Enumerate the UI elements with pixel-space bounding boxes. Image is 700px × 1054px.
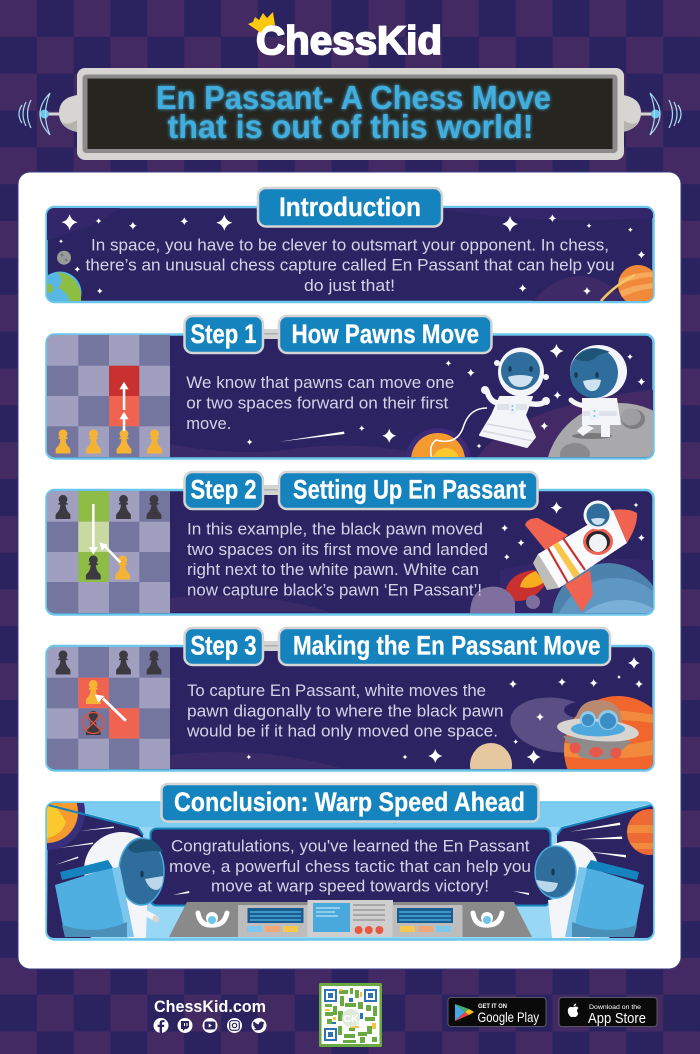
icon: sun bbox=[406, 428, 471, 457]
badge: App Store: Download on the bbox=[589, 1004, 641, 1011]
text: step 2: right next to the white pawn. White can bbox=[187, 561, 479, 579]
icon: moon bbox=[57, 251, 71, 265]
left console screen bbox=[238, 905, 308, 937]
panel: step 1 bbox=[45, 333, 655, 460]
text: conclusion: move at warp speed towards victory! bbox=[211, 878, 489, 896]
title text bbox=[156, 79, 551, 145]
icon: tan planet bbox=[470, 743, 512, 769]
left antenna bbox=[19, 93, 77, 135]
heading: Introduction: Introduction bbox=[279, 192, 421, 222]
right antenna bbox=[623, 93, 681, 135]
icon: blue planet bbox=[552, 563, 653, 613]
text: step 3: To capture En Passant, white moves the bbox=[187, 682, 486, 700]
badge: Google Play: Google Play bbox=[478, 1009, 539, 1025]
chess board bbox=[47, 335, 170, 457]
icon: twitch bbox=[178, 1018, 192, 1033]
icon: play triangle bbox=[455, 1004, 474, 1021]
stars bbox=[59, 214, 645, 295]
right console screen bbox=[392, 905, 462, 937]
heading: step 3: Making the En Passant Move bbox=[293, 630, 600, 660]
title text: En Passant- A Chess Move bbox=[156, 79, 551, 116]
comet bbox=[279, 432, 344, 442]
icon: cloud bbox=[470, 587, 540, 615]
icon: twitter bbox=[252, 1018, 266, 1033]
badge: App Store bbox=[559, 998, 657, 1027]
logo wordmark: ChessKid bbox=[256, 19, 442, 63]
icon: instagram bbox=[227, 1018, 242, 1033]
right dial bbox=[473, 912, 502, 925]
panel: introduction bbox=[45, 206, 655, 304]
green modules bbox=[325, 988, 377, 1043]
text: step 1: move. bbox=[186, 415, 231, 433]
arrows bbox=[89, 504, 121, 563]
heading: step 2 bbox=[184, 472, 538, 509]
black pawns bbox=[56, 495, 161, 580]
yellow modules bbox=[325, 989, 376, 1029]
footer: website: ChessKid.com bbox=[154, 997, 266, 1016]
heading: step 1: How Pawns Move bbox=[292, 319, 479, 349]
panel: step 2 bbox=[45, 488, 655, 616]
text: step 3: would be if it had only moved one space. bbox=[186, 722, 498, 740]
text: step 2 bbox=[187, 520, 488, 600]
control console bbox=[169, 900, 532, 937]
icon: crown bbox=[248, 12, 275, 33]
icon: facebook bbox=[154, 1018, 168, 1033]
text: step 1: or two spaces forward on their first bbox=[186, 394, 449, 412]
icon: astronaut on moon bbox=[570, 345, 627, 437]
icon: UFO bbox=[556, 700, 640, 760]
heading: step 1 bbox=[184, 316, 492, 353]
speed lines over message bbox=[173, 891, 529, 895]
text: conclusion bbox=[169, 838, 531, 896]
icon: ringed planet bbox=[600, 265, 653, 301]
heading: conclusion: Conclusion: Warp Speed Ahead bbox=[174, 787, 525, 817]
text: conclusion: Congratulations, you've learned the En Passant bbox=[171, 838, 530, 856]
center console bbox=[308, 900, 393, 937]
arrow bbox=[95, 694, 127, 722]
icon: galaxy swirl bbox=[510, 698, 576, 752]
title sign bbox=[77, 68, 624, 160]
main white panel bbox=[18, 172, 681, 969]
icon: moon surface bbox=[548, 403, 653, 457]
speed lines bbox=[55, 822, 626, 865]
text: step 3: pawn diagonally to where the black pawn bbox=[187, 702, 504, 720]
right window bbox=[556, 804, 653, 938]
badge: Google Play: GET IT ON bbox=[478, 1004, 507, 1010]
icon: youtube bbox=[202, 1018, 218, 1033]
footer: website bbox=[154, 997, 266, 1033]
chess board bbox=[47, 647, 170, 770]
white pawns bbox=[56, 430, 162, 454]
text: introduction: there’s an unusual chess capture called En Passant that can help you bbox=[86, 257, 614, 275]
QR center badge: CK bbox=[344, 1014, 359, 1025]
logo: ChessKid bbox=[248, 12, 442, 63]
icon: flame bbox=[505, 570, 545, 601]
text: introduction: In space, you have to be clever to outsmart your opponent. In chess, bbox=[91, 236, 609, 254]
black pawns bbox=[56, 650, 161, 735]
icon: left astronaut bbox=[55, 832, 164, 938]
icon: right astronaut bbox=[535, 841, 644, 938]
heading: step 2: Setting Up En Passant bbox=[293, 474, 526, 504]
text: step 2: now capture black’s pawn ‘En Passant’! bbox=[187, 582, 482, 600]
heading: step 1: Step 1 bbox=[190, 319, 256, 349]
white pawn bbox=[86, 680, 101, 704]
heading: step 3 bbox=[184, 628, 610, 665]
arrows bbox=[120, 382, 128, 431]
badge: Google Play bbox=[448, 998, 546, 1026]
icon: astronaut floating bbox=[480, 348, 550, 447]
heading: Introduction bbox=[258, 188, 442, 226]
stars bbox=[246, 657, 643, 764]
icon: apple bbox=[568, 1004, 578, 1017]
badge: App Store: App Store bbox=[588, 1011, 646, 1027]
icon: rocket bbox=[525, 500, 637, 612]
text: introduction: do just that! bbox=[304, 277, 395, 295]
heading: step 2: Step 2 bbox=[190, 474, 256, 504]
chess board bbox=[47, 491, 170, 613]
text: conclusion: move, a powerful chess tactic that can help you bbox=[169, 858, 531, 876]
stars bbox=[501, 502, 645, 560]
text: step 1 bbox=[186, 374, 454, 433]
panel: step 3 bbox=[45, 644, 655, 772]
panel: conclusion message bbox=[150, 828, 550, 906]
captured marker bbox=[83, 712, 104, 734]
text: step 2: In this example, the black pawn moved bbox=[187, 520, 483, 538]
icon: earth bbox=[47, 272, 82, 301]
left window bbox=[47, 803, 144, 938]
finder squares bbox=[324, 989, 377, 1041]
text: step 1: We know that pawns can move one bbox=[186, 374, 454, 392]
white pawn bbox=[115, 556, 130, 580]
text: introduction bbox=[86, 236, 614, 295]
left dial bbox=[198, 912, 227, 925]
title text: that is out of this world! bbox=[168, 108, 534, 145]
QR code bbox=[319, 983, 382, 1047]
icon: orange planet bbox=[564, 696, 653, 769]
cable bbox=[431, 408, 487, 458]
heading: step 3: Step 3 bbox=[190, 630, 256, 660]
stars bbox=[247, 344, 645, 448]
text: step 2: two spaces on its first move and landed bbox=[187, 541, 488, 559]
panel: conclusion bbox=[45, 801, 655, 941]
text: step 3 bbox=[186, 682, 504, 740]
